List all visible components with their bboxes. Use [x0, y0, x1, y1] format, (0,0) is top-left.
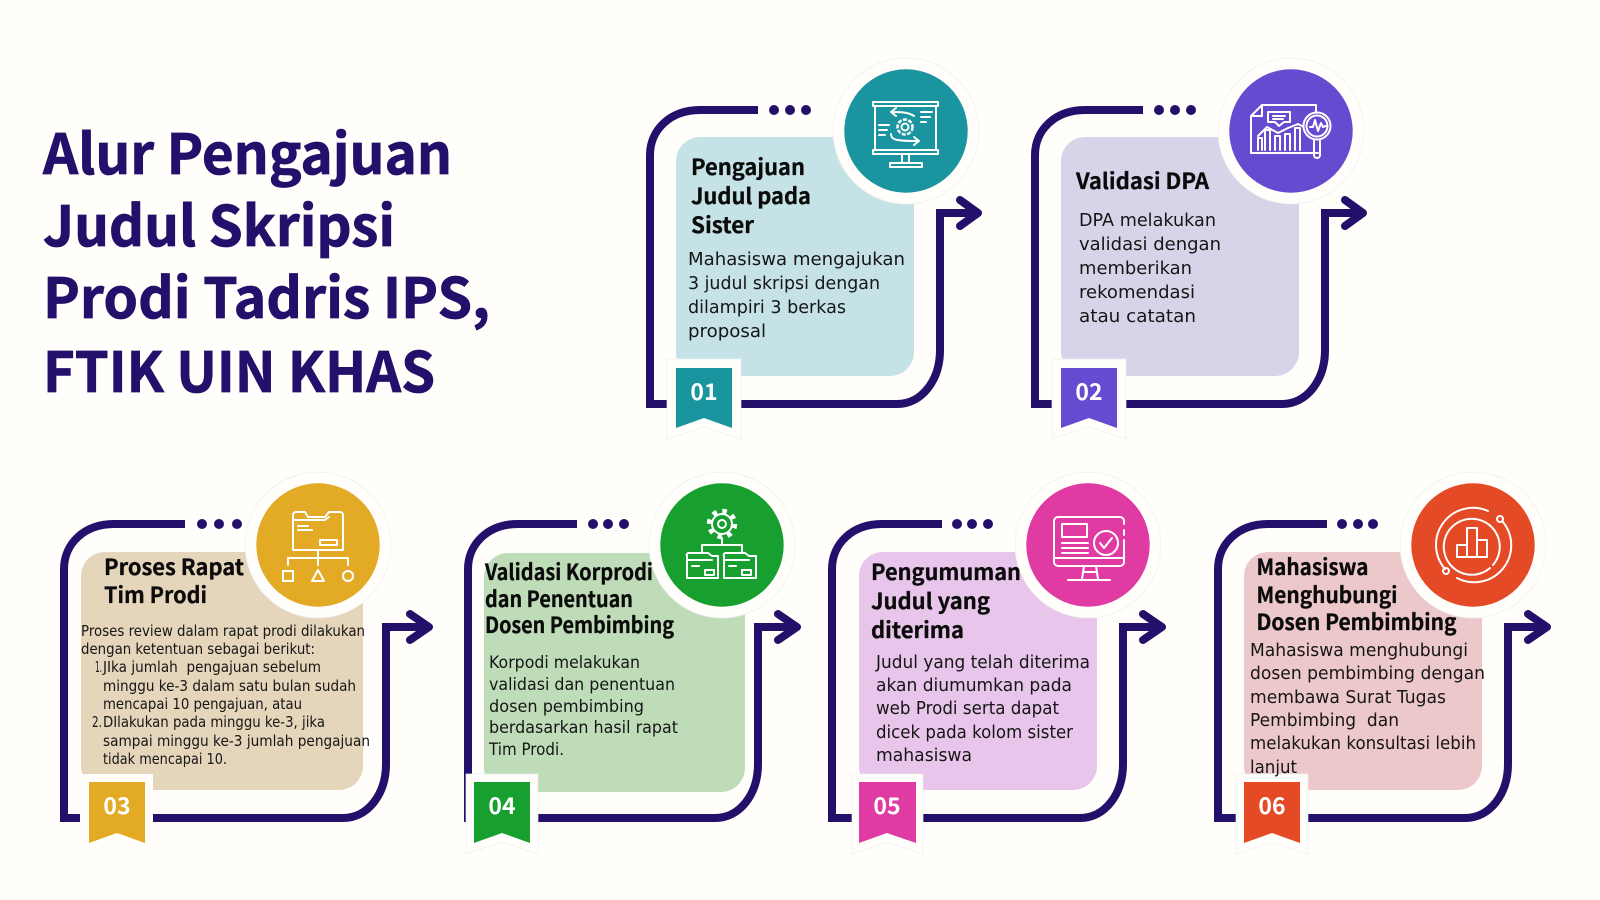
body text 03: minggu ke-3 dalam satu bulan sudah: [103, 677, 356, 695]
card background 03: [81, 552, 363, 790]
body text 06: Pembimbing dan: [1250, 710, 1399, 731]
body text 05: [875, 652, 1090, 766]
body text 03: mencapai 10 pengajuan, atau: [103, 695, 302, 713]
ribbon 02: 02: [1075, 373, 1103, 407]
body text 04: validasi dan penentuan: [489, 675, 675, 695]
title: Alur Pengajuan: [42, 110, 452, 190]
body text 02: rekomendasi: [1079, 282, 1195, 303]
heading 06: Dosen Pembimbing: [1256, 605, 1456, 637]
icon circle: report and magnifier: [1218, 58, 1364, 204]
heading 01: Judul pada: [691, 179, 811, 211]
body text 05: web Prodi serta dapat: [876, 698, 1059, 719]
body text 02: DPA melakukan: [1079, 210, 1216, 231]
body text 03: sampai minggu ke-3 jumlah pengajuan: [103, 732, 370, 750]
frame line with arrow 04: [468, 519, 797, 818]
heading 01: [691, 150, 811, 240]
body text 03: JIka jumlah pengajuan sebelum: [102, 658, 321, 676]
body text 02: atau catatan: [1079, 306, 1196, 327]
body text 03: [81, 622, 370, 768]
heading 02: Validasi DPA: [1075, 164, 1210, 196]
body text 04: dosen pembimbing: [489, 697, 644, 717]
body text 04: Tim Prodi.: [488, 740, 564, 760]
body text 03: dengan ketentuan sebagai berikut:: [81, 640, 315, 658]
body text 05: Judul yang telah diterima: [875, 652, 1090, 673]
heading 05: Judul yang: [871, 584, 990, 616]
ribbon 02: [1052, 359, 1126, 439]
frame line with arrow 05: [832, 519, 1162, 818]
body text 03: Proses review dalam rapat prodi dilakukan: [81, 622, 365, 640]
ribbon 05: [852, 774, 923, 854]
ribbon 04: [466, 774, 538, 854]
heading 05: Pengumuman: [871, 555, 1021, 587]
ribbon 06: [1236, 774, 1308, 854]
heading 04: Dosen Pembimbing: [485, 608, 674, 640]
heading 06: Menghubungi: [1256, 578, 1398, 610]
card background 06: [1244, 552, 1482, 790]
frame line with arrow 01: [650, 105, 978, 404]
card background 05: [859, 552, 1097, 790]
panel: step 03: [64, 472, 429, 854]
body text 03: tidak mencapai 10.: [103, 750, 227, 768]
card background 04: [484, 553, 745, 792]
icon circle: chart in orbit: [1400, 472, 1546, 618]
title: [42, 110, 490, 408]
frame line with arrow 06: [1218, 519, 1547, 818]
panel: step 02: [1035, 58, 1364, 439]
card background 02: [1061, 137, 1299, 376]
body text 03: 2.: [92, 713, 102, 731]
body text 06: Mahasiswa menghubungi: [1250, 640, 1468, 661]
body text 02: validasi dengan: [1079, 234, 1221, 255]
body text 04: berdasarkan hasil rapat: [489, 718, 678, 738]
ribbon 03: [80, 774, 153, 854]
ribbon 04: 04: [488, 787, 516, 821]
icon circle: folder tree: [245, 472, 391, 618]
body text 05: mahasiswa: [876, 745, 972, 766]
heading 04: dan Penentuan: [485, 582, 633, 614]
heading 06: [1256, 550, 1456, 637]
heading 01: Sister: [691, 208, 754, 240]
body text 06: dosen pembimbing dengan: [1250, 663, 1485, 684]
heading 03: [104, 550, 244, 610]
panel: step 06: [1218, 472, 1547, 854]
body text 01: 3 judul skripsi dengan: [688, 273, 880, 294]
body text 01: proposal: [688, 321, 766, 342]
body text 06: membawa Surat Tugas: [1250, 687, 1446, 708]
ribbon 06: 06: [1258, 787, 1286, 821]
heading 06: Mahasiswa: [1256, 550, 1368, 582]
ribbon 01: 01: [690, 373, 718, 407]
body text 05: akan diumumkan pada: [876, 675, 1072, 696]
ribbon 03: 03: [103, 787, 131, 821]
heading 04: [484, 555, 674, 640]
icon circle: presentation gear: [833, 58, 979, 204]
frame line with arrow 03: [64, 519, 429, 818]
body text 06: lanjut: [1250, 757, 1297, 778]
ribbon 05: 05: [873, 787, 901, 821]
icon circle: monitor check: [1015, 472, 1161, 618]
heading 03: Tim Prodi: [104, 578, 207, 610]
icon circle: gear and folders: [649, 472, 795, 618]
body text 02: memberikan: [1079, 258, 1192, 279]
heading 03: Proses Rapat: [104, 550, 244, 582]
panel: step 05: [832, 472, 1162, 854]
panel: step 01: [650, 58, 979, 439]
body text 01: Mahasiswa mengajukan: [688, 249, 905, 270]
body text 03: 1.: [95, 658, 102, 676]
heading 05: diterima: [871, 613, 964, 645]
body text 04: [488, 653, 678, 760]
body text 04: Korpodi melakukan: [489, 653, 640, 673]
body text 03: DIlakukan pada minggu ke-3, jika: [103, 713, 325, 731]
heading 01: Pengajuan: [691, 150, 805, 182]
body text 02: [1079, 210, 1221, 327]
body text 01: [688, 249, 905, 342]
body text 06: melakukan konsultasi lebih: [1250, 733, 1476, 754]
frame line with arrow 02: [1035, 105, 1363, 404]
ribbon 01: [667, 359, 741, 439]
title: Prodi Tadris IPS,: [43, 254, 490, 334]
body text 01: dilampiri 3 berkas: [688, 297, 846, 318]
body text 05: dicek pada kolom sister: [876, 722, 1074, 743]
heading 05: [871, 555, 1021, 645]
heading 04: Validasi Korprodi: [484, 555, 653, 587]
body text 06: [1250, 640, 1485, 778]
title: FTIK UIN KHAS: [43, 328, 435, 408]
title: Judul Skripsi: [43, 182, 395, 262]
card background 01: [676, 137, 914, 376]
panel: step 04: [466, 472, 797, 854]
